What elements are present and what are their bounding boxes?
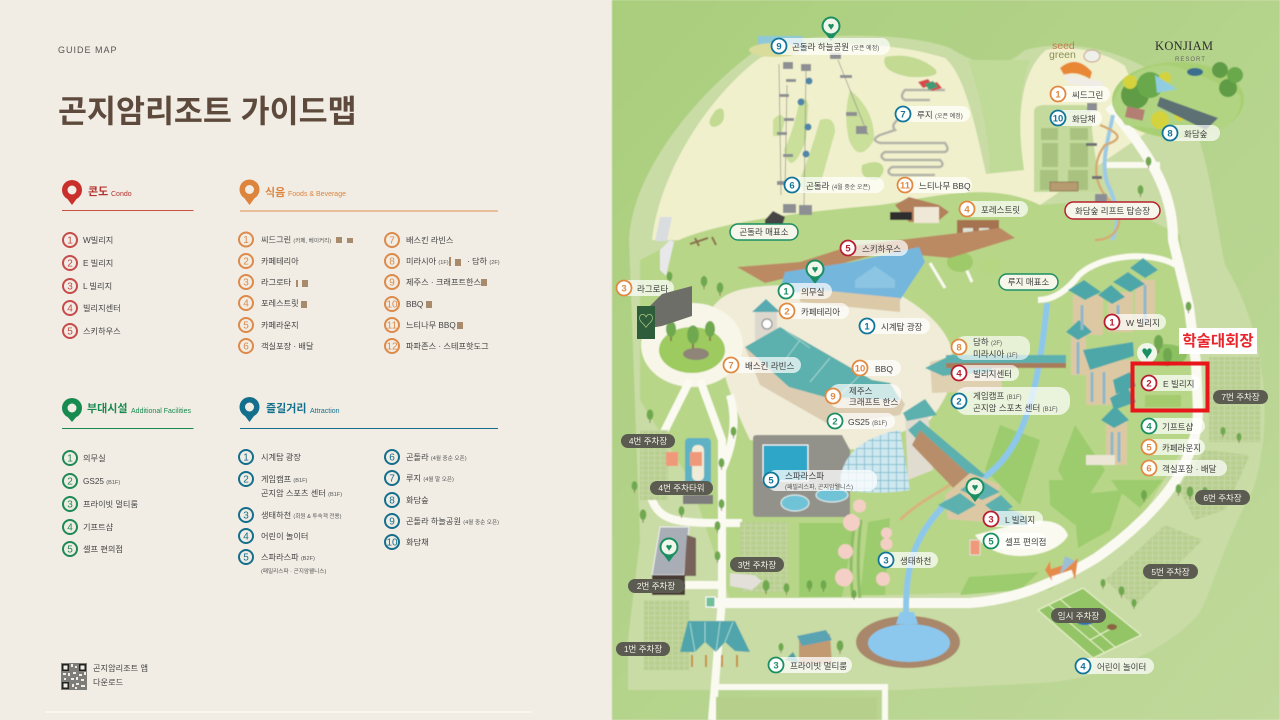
parking label: 7 bbox=[1213, 390, 1268, 404]
label: E village bbox=[1142, 375, 1200, 391]
label: game camp and sports center bbox=[952, 387, 1070, 415]
parking label: 4 bbox=[621, 434, 675, 448]
list: condo items: 5 bbox=[67, 326, 73, 338]
label: zelkova BBQ: 느티나무 BBQ bbox=[919, 181, 971, 191]
icon: heart pin sky park bbox=[822, 16, 840, 41]
list: attraction column one: 어린이 놀이터 bbox=[261, 531, 308, 541]
list: facilities items: 프라이빗 멀티룸 bbox=[83, 499, 138, 509]
heading: condo: Condo bbox=[111, 191, 132, 198]
list: foods column one: 카페라운지 bbox=[261, 320, 299, 330]
list: attraction column one: 1 bbox=[243, 452, 249, 464]
list: foods column two bbox=[385, 233, 500, 353]
label: baskin robbins: 7 bbox=[728, 360, 734, 372]
list: foods column one: 포레스트릿 bbox=[261, 298, 299, 308]
list: foods column one: 1 bbox=[243, 235, 249, 246]
parking label: 5 bbox=[1143, 564, 1198, 579]
label: cafe lounge bbox=[1142, 439, 1205, 455]
label: lodge ticket office: 루지 매표소 bbox=[1008, 277, 1049, 287]
list: condo items: 3 bbox=[67, 282, 73, 292]
icon: heart pin parking building: ♥ bbox=[666, 542, 672, 554]
section: additional facilities bbox=[62, 398, 194, 556]
label: gondola: 6 bbox=[789, 180, 795, 192]
icon: teal pin bbox=[240, 397, 260, 422]
label: ski house: 스키하우스 bbox=[862, 244, 901, 254]
list: facilities items: 기프트샵 bbox=[83, 522, 114, 532]
lake bbox=[856, 616, 960, 668]
label: hwadamchae: 10 bbox=[1053, 114, 1063, 124]
label: spa la spa: 5 bbox=[768, 476, 774, 486]
icon: green pin bbox=[62, 398, 82, 422]
list: condo items: 4 bbox=[67, 304, 73, 314]
heading: facilities bbox=[87, 401, 192, 415]
luge track and karts bbox=[875, 90, 948, 175]
eyebrow: guide map: GUIDE MAP bbox=[58, 45, 118, 55]
parking label: 2 bbox=[628, 579, 685, 593]
heading: condo bbox=[88, 185, 132, 198]
panel: resort map bbox=[612, 0, 1280, 720]
heading: attraction: Attraction bbox=[310, 408, 340, 415]
label: game camp and sports center: 게임캠프 (B1F) bbox=[973, 391, 1022, 401]
list: attraction column two: 화담채 bbox=[406, 537, 429, 547]
list: attraction column one: (패밀리스파 · 곤지암웰니스) bbox=[261, 567, 326, 575]
label: W village: W 빌리지 bbox=[1126, 318, 1160, 328]
list: foods column two: 미라시아 (1F) bbox=[406, 256, 449, 266]
list: attraction column two: 9 bbox=[389, 516, 395, 528]
icon: heart pin ski house: ♥ bbox=[812, 264, 818, 276]
label: hwadam forest lift: 화담숲 리프트 탑승장 bbox=[1075, 206, 1150, 216]
text: app download bbox=[93, 663, 148, 687]
list: condo items: E 빌리지 bbox=[83, 258, 113, 268]
label: lodge ticket office bbox=[999, 274, 1058, 290]
label: ski house: 5 bbox=[845, 244, 851, 254]
blue ski house bbox=[780, 247, 925, 303]
entrance gate bbox=[680, 621, 750, 652]
list: foods column one: 카페테리아 bbox=[261, 256, 299, 266]
glass dome and pool complex bbox=[753, 435, 850, 517]
logo: Konjiam Resort: KONJIAM bbox=[1155, 39, 1213, 53]
parking label: 1 bbox=[616, 642, 670, 656]
panel: guide legend bbox=[0, 0, 612, 720]
long teal hall bbox=[745, 327, 905, 425]
green lawns bbox=[799, 425, 1163, 597]
label: GS25: GS25 (B1F) bbox=[848, 417, 887, 427]
list: foods column two: 8 bbox=[389, 256, 395, 268]
heading: foods: 식음 bbox=[265, 186, 285, 199]
croissant and cup bbox=[1060, 62, 1092, 79]
label: cafeteria: 2 bbox=[784, 306, 790, 318]
label: gift shop: 4 bbox=[1146, 422, 1152, 432]
label: forest street bbox=[960, 201, 1028, 217]
parking label: 2: 2번 주차장 bbox=[637, 581, 675, 591]
label: self convenience store: 셀프 편의점 bbox=[1005, 537, 1046, 547]
list: facilities items: 1 bbox=[67, 454, 73, 464]
text: app download: 다운로드 bbox=[93, 678, 124, 687]
list: foods column two: 9 bbox=[389, 278, 395, 288]
list: attraction column two: 화담숲 bbox=[406, 495, 429, 505]
label: ski house bbox=[840, 240, 908, 256]
icon: orange pin bbox=[240, 180, 260, 205]
parking label: temporary bbox=[1051, 608, 1106, 623]
list: facilities items bbox=[63, 451, 138, 556]
list: facilities items: GS25 (B1F) bbox=[83, 477, 120, 486]
label: hwadam forest: 8 bbox=[1167, 128, 1173, 140]
label: BBQ: 10 bbox=[855, 364, 865, 374]
label: luge: 루지 (오픈 예정) bbox=[917, 110, 963, 120]
logo: seed green bbox=[1049, 40, 1076, 61]
list: attraction column one bbox=[239, 450, 342, 575]
label: spa la spa: 스파라스파 bbox=[785, 471, 824, 481]
list: foods column two: 10 bbox=[386, 300, 398, 310]
heading: foods: Foods & Beverage bbox=[288, 191, 346, 198]
list: attraction column two: 7 bbox=[389, 474, 395, 484]
label: seed green: 씨드그린 bbox=[1072, 90, 1103, 100]
list: condo items: 1 bbox=[67, 236, 73, 246]
heading: condo: 콘도 bbox=[88, 185, 108, 198]
heading: attraction: 즐길거리 bbox=[266, 401, 306, 415]
seed green forest bbox=[1112, 62, 1244, 138]
list: attraction column two: 곤돌라 (4월 중순 오픈) bbox=[406, 453, 467, 462]
parking label: 7: 7번 주차장 bbox=[1221, 392, 1260, 402]
list: foods column two: 제주스 · 크래프트한스 bbox=[406, 278, 482, 287]
label: zelkova BBQ bbox=[898, 177, 972, 193]
label: takeout and delivery: 6 bbox=[1146, 464, 1152, 474]
label: L village bbox=[984, 511, 1043, 527]
list: foods column two: 12 bbox=[386, 342, 398, 352]
la grotta building bbox=[637, 286, 692, 339]
label: zelkova BBQ: 11 bbox=[900, 180, 911, 192]
label: first aid: 1 bbox=[783, 286, 789, 298]
label: gondola sky park bbox=[772, 38, 890, 55]
parking label: 3: 3번 주차장 bbox=[738, 560, 776, 570]
label: GS25: 2 bbox=[832, 416, 838, 428]
multi room building bbox=[799, 634, 832, 664]
icon: heart marker E village: ♥ bbox=[1141, 343, 1153, 364]
list: foods column two: 느티나무 BBQ bbox=[406, 321, 456, 330]
list: foods column one: 라그로타 bbox=[261, 278, 292, 287]
label: children playground bbox=[1076, 658, 1154, 674]
resort villas bbox=[1071, 280, 1155, 465]
label: spa la spa bbox=[764, 470, 877, 491]
label: gondola ticket office bbox=[730, 224, 798, 240]
label: ecological stream bbox=[878, 552, 938, 568]
label: game camp and sports center: 2 bbox=[956, 396, 962, 408]
label: cafe lounge: 5 bbox=[1146, 442, 1152, 454]
list: foods column two: 11 bbox=[387, 320, 398, 332]
gondola platform bbox=[765, 211, 785, 229]
label: jeju and craft hans: 9 bbox=[830, 392, 836, 402]
label: cafeteria: 카페테리아 bbox=[801, 307, 840, 317]
list: foods column two: 7 bbox=[389, 236, 395, 246]
BBQ lodge and forest street bbox=[895, 197, 949, 222]
label: BBQ bbox=[852, 360, 901, 376]
list: attraction column one: 4 bbox=[243, 532, 249, 542]
label: baskin robbins bbox=[724, 357, 801, 373]
label: clock tower plaza bbox=[860, 318, 930, 334]
list: foods column two: · 담하 (2F) bbox=[467, 256, 500, 266]
list: foods column one: 4 bbox=[243, 298, 249, 310]
logo: seed green: seed bbox=[1052, 40, 1075, 52]
list: attraction column one: 시계탑 광장 bbox=[261, 452, 301, 462]
icon: QR code bbox=[61, 663, 87, 690]
list: foods column one bbox=[239, 232, 353, 353]
list: attraction column one: 게임캠프 (B1F) bbox=[261, 474, 308, 484]
plaza and roads bbox=[712, 285, 954, 450]
label: jeju and craft hans: 제주스 bbox=[849, 386, 873, 396]
label: hwadamchae bbox=[1050, 110, 1102, 126]
label: hwadam forest: 화담숲 bbox=[1184, 129, 1208, 139]
parking tower and buildings bbox=[685, 438, 711, 488]
parking label: temporary: 임시 주차장 bbox=[1058, 611, 1099, 621]
label: self convenience store bbox=[984, 533, 1047, 549]
parking label: 4 tower bbox=[650, 481, 713, 495]
label: jeju and craft hans: 크래프트 한스 bbox=[849, 397, 898, 407]
icon: red pin bbox=[62, 180, 82, 205]
cherry blossom trees bbox=[853, 500, 866, 512]
list: condo items: L 빌리지 bbox=[83, 281, 112, 291]
label: takeout and delivery bbox=[1142, 460, 1227, 476]
label: gondola bbox=[784, 177, 884, 193]
QR code and app download bbox=[61, 663, 148, 690]
list: attraction column two: 곤돌라 하늘공원 (4월 중순 오픈) bbox=[406, 516, 499, 526]
list: attraction column one: 스파라스파 (B2F) bbox=[261, 553, 315, 562]
sports field bbox=[1038, 588, 1141, 658]
list: facilities items: 2 bbox=[67, 476, 73, 488]
list: condo items: 스키하우스 bbox=[83, 326, 121, 336]
label: private multi room: 3 bbox=[773, 660, 779, 672]
label: forest street: 4 bbox=[964, 204, 970, 216]
section: condo bbox=[62, 180, 194, 338]
list: facilities items: 4 bbox=[67, 522, 73, 534]
callout: conference venue: 학술대회장 bbox=[1182, 332, 1254, 350]
label: la grotta bbox=[616, 280, 674, 296]
label: clock tower plaza: 시계탑 광장 bbox=[881, 322, 923, 332]
label: GS25 bbox=[828, 413, 895, 429]
label: children playground: 4 bbox=[1080, 662, 1086, 672]
la grotta building: ♡ bbox=[638, 314, 654, 331]
parking label: 3 bbox=[730, 557, 784, 572]
label: ecological stream: 생태하천 bbox=[900, 556, 931, 566]
list: foods column one: 6 bbox=[243, 342, 249, 352]
label: baskin robbins: 배스킨 라빈스 bbox=[745, 361, 794, 371]
parking lots bbox=[640, 430, 668, 500]
label: damha and mirasia: 미라시아 (1F) bbox=[973, 349, 1018, 359]
label: gift shop bbox=[1142, 418, 1205, 434]
label: cafeteria bbox=[780, 303, 849, 319]
trees bbox=[632, 157, 1242, 654]
clock tower bbox=[755, 312, 777, 348]
list: attraction column two bbox=[385, 450, 499, 549]
icon: heart pin ski house bbox=[806, 260, 824, 284]
list: attraction column one: 5 bbox=[243, 552, 249, 564]
list: foods column two: BBQ bbox=[406, 300, 423, 309]
list: condo items: 빌리지센터 bbox=[83, 303, 121, 313]
list: foods column one: 3 bbox=[243, 278, 249, 288]
section: foods and beverage bbox=[239, 180, 500, 353]
label: jeju and craft hans bbox=[826, 384, 901, 408]
gondola cables and cabins bbox=[779, 60, 868, 210]
label: private multi room bbox=[768, 657, 852, 673]
list: foods column one: 5 bbox=[243, 320, 249, 332]
list: foods column two: 배스킨 라빈스 bbox=[406, 235, 454, 245]
label: E village: E 빌리지 bbox=[1163, 379, 1194, 389]
callout: conference venue bbox=[1179, 328, 1257, 354]
title: 곤지암리조트 가이드맵 bbox=[58, 93, 357, 129]
label: damha and mirasia bbox=[952, 336, 1030, 360]
parking label: 4 tower: 4번 주차타워 bbox=[658, 483, 705, 493]
list: foods column one: 객실포장 · 배달 bbox=[261, 341, 314, 351]
label: luge: 7 bbox=[900, 110, 906, 120]
label: E village: 2 bbox=[1146, 378, 1152, 390]
logo: Konjiam Resort: RESORT bbox=[1175, 57, 1206, 63]
label: self convenience store: 5 bbox=[988, 536, 994, 548]
label: spa la spa: (패밀리스파, 곤지암웰니스) bbox=[785, 483, 853, 491]
label: luge bbox=[896, 106, 970, 122]
icon: heart pin parking building bbox=[660, 538, 678, 562]
icon: heart marker E village bbox=[1137, 343, 1157, 364]
heading: facilities: Additional Facilities bbox=[131, 408, 192, 415]
list: facilities items: 5 bbox=[67, 544, 73, 556]
list: attraction column two: 6 bbox=[389, 452, 395, 464]
label: W village bbox=[1104, 314, 1166, 330]
label: BBQ: BBQ bbox=[875, 364, 893, 374]
list: foods column one: 2 bbox=[243, 256, 249, 268]
main perimeter road bbox=[712, 106, 1198, 603]
list: attraction column one: 3 bbox=[243, 510, 249, 522]
list: attraction column two: 루지 (4월 말 오픈) bbox=[406, 474, 454, 483]
label: seed green: 1 bbox=[1055, 90, 1061, 100]
list: attraction column two: 10 bbox=[386, 538, 398, 548]
label: first aid bbox=[778, 283, 832, 299]
callout: red highlight box bbox=[1132, 364, 1208, 410]
label: first aid: 의무실 bbox=[801, 287, 824, 297]
text: app download: 곤지암리조트 앱 bbox=[93, 663, 148, 673]
parking label: 6: 6번 주차장 bbox=[1203, 493, 1242, 503]
list: foods column one: 씨드그린 (카페, 베이커리) bbox=[261, 234, 331, 244]
list: facilities items: 의무실 bbox=[83, 453, 106, 463]
label: la grotta: 3 bbox=[621, 284, 627, 294]
label: children playground: 어린이 놀이터 bbox=[1097, 662, 1146, 672]
label: L village: 3 bbox=[988, 514, 994, 526]
list: facilities items: 셀프 편의점 bbox=[83, 544, 123, 554]
heading: facilities: 부대시설 bbox=[87, 401, 127, 415]
label: ecological stream: 3 bbox=[883, 556, 889, 566]
logo: seed green: green bbox=[1049, 49, 1076, 61]
list: foods column two: 파파존스 · 스테프핫도그 bbox=[406, 341, 489, 351]
parking label: 4: 4번 주차장 bbox=[629, 436, 667, 446]
label: hwadam forest bbox=[1162, 125, 1220, 141]
label: gondola ticket office: 곤돌라 매표소 bbox=[739, 227, 789, 237]
list: attraction column one: 생태하천 (회원 & 투숙객 전용) bbox=[261, 510, 342, 520]
heading: foods bbox=[265, 186, 346, 199]
heading: attraction bbox=[266, 401, 340, 415]
label: gondola sky park: 곤돌라 하늘공원 (오픈 예정) bbox=[792, 42, 879, 52]
list: attraction column one: 2 bbox=[243, 474, 249, 486]
label: game camp and sports center: 곤지암 스포츠 센터 (B1F) bbox=[973, 403, 1058, 413]
label: village center: 4 bbox=[956, 368, 962, 380]
wooden deck bbox=[737, 228, 1015, 283]
label: hwadamchae: 화담채 bbox=[1072, 114, 1095, 124]
label: gift shop: 기프트샵 bbox=[1162, 422, 1193, 432]
label: village center: 빌리지센터 bbox=[973, 369, 1012, 379]
label: seed green bbox=[1050, 86, 1110, 102]
label: cafe lounge: 카페라운지 bbox=[1162, 443, 1201, 453]
list: condo items: 2 bbox=[67, 258, 73, 270]
list: condo items bbox=[63, 233, 121, 338]
label: W village: 1 bbox=[1109, 318, 1115, 328]
icon: heart pin L village bbox=[966, 478, 984, 502]
label: forest street: 포레스트릿 bbox=[981, 205, 1020, 215]
map terrain and illustrations bbox=[612, 0, 1280, 720]
parking label: 1: 1번 주차장 bbox=[624, 644, 662, 654]
section: attraction bbox=[239, 397, 499, 575]
label: damha and mirasia: 담하 (2F) bbox=[973, 337, 1002, 347]
label: clock tower plaza: 1 bbox=[864, 322, 870, 332]
list: attraction column one: 곤지암 스포츠 센터 (B1F) bbox=[261, 488, 342, 498]
label: la grotta: 라그로타 bbox=[637, 284, 668, 294]
list: attraction column two: 8 bbox=[389, 496, 395, 506]
label: gondola: 곤돌라 (4월 중순 오픈) bbox=[806, 181, 870, 191]
label: damha and mirasia: 8 bbox=[956, 342, 962, 354]
list: facilities items: 3 bbox=[67, 500, 73, 510]
label: hwadam forest lift bbox=[1065, 202, 1160, 219]
label: gondola sky park: 9 bbox=[776, 42, 782, 52]
parking label: 6 bbox=[1195, 490, 1250, 505]
label: L village: L 빌리지 bbox=[1005, 515, 1035, 525]
list: condo items: W빌리지 bbox=[83, 235, 113, 245]
label: village center bbox=[952, 365, 1019, 381]
streams and trails bbox=[906, 303, 1047, 612]
logo: Konjiam Resort bbox=[1155, 39, 1213, 63]
label: private multi room: 프라이빗 멀티룸 bbox=[790, 661, 847, 671]
parking label: 5: 5번 주차장 bbox=[1151, 567, 1190, 577]
label: takeout and delivery: 객실포장 · 배달 bbox=[1162, 464, 1217, 474]
icon: heart pin L village: ♥ bbox=[972, 482, 978, 494]
icon: heart pin sky park: ♥ bbox=[828, 21, 834, 33]
